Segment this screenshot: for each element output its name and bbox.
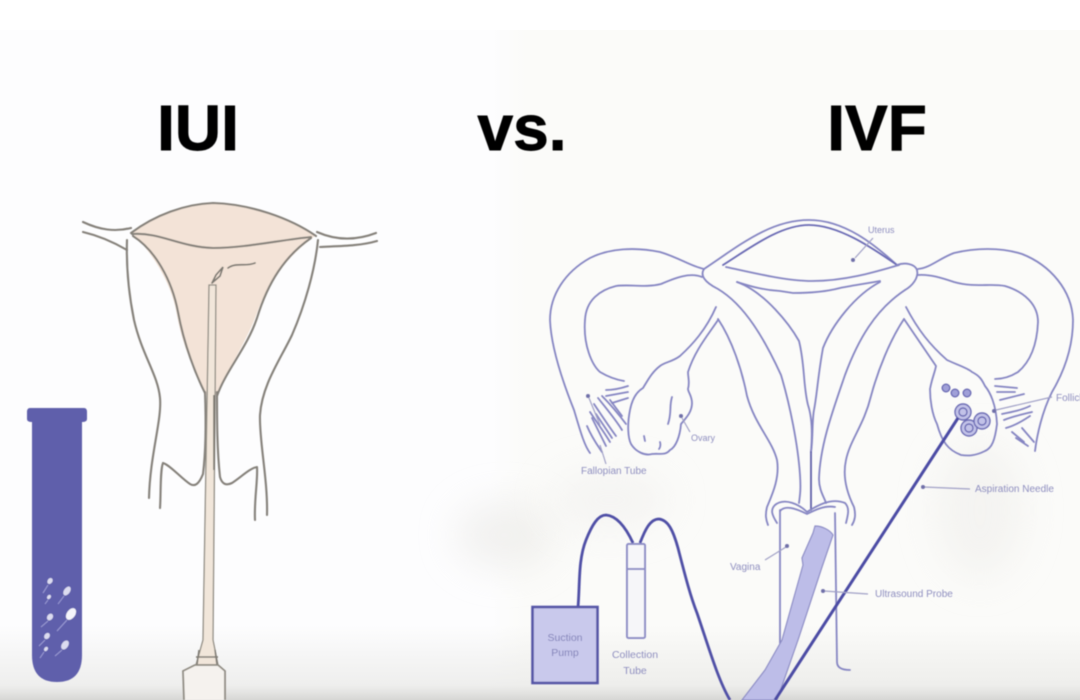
label: Ovary: Ovary <box>691 433 716 443</box>
left ovary <box>628 307 718 455</box>
uterus outline <box>127 203 318 520</box>
catheter <box>183 263 255 700</box>
suction tubing <box>578 515 730 700</box>
label: Ultrasound Probe <box>821 589 953 600</box>
suction pump: Pump <box>551 647 579 659</box>
label: Ultrasound Probe: Ultrasound Probe <box>875 589 953 600</box>
collection tube <box>627 544 645 638</box>
uterus body <box>703 220 917 525</box>
suction pump: Suction <box>547 632 583 644</box>
aspiration needle <box>775 418 958 700</box>
label: Aspiration Needle <box>921 484 1054 495</box>
label: Collection Tube: Collection <box>612 649 658 661</box>
label: Aspiration Needle: Aspiration Needle <box>975 484 1054 495</box>
title: vs.: vs. <box>478 92 566 164</box>
right ovary with follicles <box>904 307 997 456</box>
vagina walls <box>772 501 850 670</box>
fallopian tube stubs <box>83 222 377 250</box>
label: Uterus <box>851 225 895 262</box>
label: Uterus: Uterus <box>868 225 895 235</box>
icon: test tube with sperm <box>27 408 87 682</box>
label: Vagina: Vagina <box>730 562 761 573</box>
left fallopian tube <box>550 249 704 453</box>
title: IUI: IUI <box>157 92 239 164</box>
label: Fallopian Tube <box>581 394 647 477</box>
diagram: IVF reproductive anatomy <box>532 220 1080 700</box>
diagram: IUI uterus <box>83 203 377 700</box>
label: Fallopian Tube: Fallopian Tube <box>581 466 647 477</box>
label: Collection Tube: Tube <box>623 665 647 677</box>
label: Vagina <box>730 544 789 573</box>
label: Follicles <box>992 393 1080 413</box>
ultrasound probe <box>742 526 833 700</box>
label: Ovary <box>679 414 716 443</box>
uterine cavity fill <box>132 203 315 395</box>
suction pump <box>532 607 598 683</box>
left fimbriae <box>587 386 628 452</box>
right fallopian tube <box>918 249 1073 451</box>
label: Collection Tube <box>612 649 658 677</box>
right fimbriae <box>995 386 1034 446</box>
title: IVF: IVF <box>827 92 927 164</box>
